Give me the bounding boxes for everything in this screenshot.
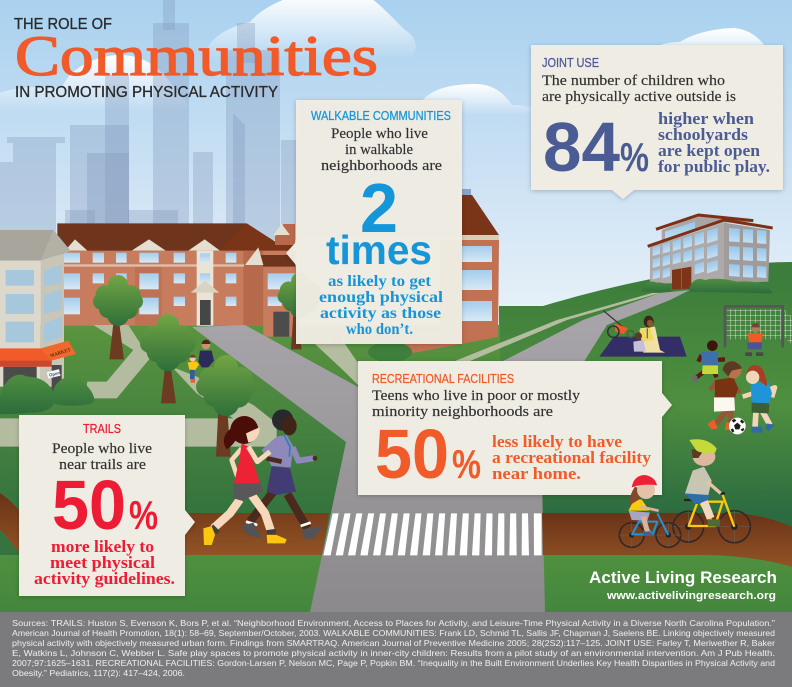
sources footer (0, 612, 792, 687)
sources footer: American Journal of Health Promotion, 18(1): 58–69, September/October, 2003. WALKABLE COMMUNITIES: Frank LD, Schmid TL, Sallis JF, Chapman J, Saelens BE. Linking objectively measured (12, 628, 775, 638)
number: 50 percent: 50 (52, 466, 126, 544)
adult and child walking on the path (188, 340, 214, 383)
left market building (0, 230, 76, 392)
light footpaths (0, 325, 277, 447)
sources footer: physical activity with objectively measured urban form. Findings from SMARTRAQ. American Journal of Preventive Medicine 2005; 28(2S2):117–125. JOINT USE: Farley T, Meriwether R, Baker (12, 638, 775, 648)
body text: near trails are (59, 457, 146, 473)
open sign: Open (49, 370, 61, 378)
panel: walkable communities (286, 100, 462, 344)
statistic text: near home. (492, 464, 581, 483)
right building wing behind card (403, 189, 499, 353)
heading: joint use: JOINT USE (542, 56, 599, 70)
title block (14, 16, 378, 101)
roads (192, 290, 690, 612)
statistic text (492, 432, 652, 483)
dirt trail (0, 493, 792, 567)
family on a blanket with stroller (599, 311, 687, 357)
body text: in walkable (345, 142, 413, 158)
crosswalk (323, 513, 542, 555)
number: 50 percent: % (129, 492, 158, 538)
number: 50 percent: 50 (375, 415, 449, 493)
trees and bushes (0, 272, 343, 457)
body text: People who live (331, 126, 428, 142)
brick campus building (57, 223, 297, 337)
number: 50 percent: % (452, 441, 481, 487)
statistic text: higher when (658, 109, 754, 128)
statistic text: who don’t. (346, 321, 413, 338)
body text (542, 73, 736, 105)
panel: recreational facilities (358, 361, 672, 495)
two people walking on the trail (203, 409, 323, 545)
statistic text: a recreational facility (492, 448, 652, 467)
small tree behind recreation card (368, 342, 412, 364)
statistic text: enough physical (319, 289, 444, 306)
sky (0, 0, 792, 330)
woman walking (203, 416, 287, 545)
statistic text: for public play. (658, 157, 770, 176)
number: 84 percent: 84 (543, 108, 620, 186)
soccer ball (729, 418, 746, 434)
body text: minority neighborhoods are (372, 404, 553, 420)
statistic text: activity guidelines. (34, 569, 175, 588)
sources footer: E, Watkins L, Johnson C, Webber L. Safe play spaces to promote physical activity in inner-city children: Results from a pilot study of an environmental intervention. Am J Pub Health. (12, 648, 775, 658)
statistic text: activity as those (320, 305, 441, 322)
panel: joint use (531, 45, 783, 199)
heading: trails: TRAILS (83, 422, 121, 436)
panel: trails (19, 415, 195, 596)
body text: The number of children who (542, 73, 725, 89)
body text: are physically active outside is (542, 89, 736, 105)
school on the hill (642, 215, 773, 293)
green hill and lawn (0, 262, 792, 612)
main title: Communities (15, 25, 378, 88)
sources footer: Obesity.” Pediatrics, 117(2): 417–424, 2006. (12, 668, 185, 678)
heading: walkable communities: WALKABLE COMMUNITIES (311, 109, 451, 123)
statistic text (34, 537, 175, 588)
older child on yellow bike (673, 439, 750, 543)
statistic text (658, 109, 770, 176)
open sign (47, 369, 61, 379)
sources footer: Sources: TRAILS: Huston S, Evenson K, Bors P, et al. “Neighborhood Environment, Access to Places for Activity, and Leisure-Time Physical Activity in a Diverse North Carolina Population.” (12, 618, 775, 628)
children playing soccer (692, 340, 775, 434)
city skyline (0, 0, 301, 240)
soccer goal and goalie (725, 306, 792, 356)
title line 3: IN PROMOTING PHYSICAL ACTIVITY (15, 84, 278, 101)
statistic text: meet physical (50, 553, 155, 572)
body text: Teens who live in poor or mostly (372, 388, 581, 404)
sources footer: 2007;97:1625–1631. RECREATIONAL FACILITIES: Gordon-Larsen P, Nelson MC, Page P, Popkin BM. “Inequality in the Built Environment Underlies Key Health Disparities in Physical Activity and (12, 658, 775, 668)
number: 2 times: 2 (360, 169, 398, 247)
cyclists (619, 439, 750, 547)
body text (372, 388, 581, 420)
title line 1: THE ROLE OF (14, 16, 112, 33)
younger child on blue bike (619, 475, 681, 547)
number: 2 times: times (326, 227, 432, 273)
statistic text: schoolyards (658, 125, 749, 144)
statistic text: as likely to get (328, 273, 432, 290)
number: 84 percent: % (620, 134, 649, 180)
logo: Active Living Research: Active Living Research (589, 569, 777, 587)
body text (52, 441, 152, 473)
body text (321, 126, 442, 174)
clouds (0, 0, 770, 115)
man walking (241, 409, 323, 539)
heading: recreational facilities: RECREATIONAL FACILITIES (372, 372, 514, 386)
statistic text (319, 273, 444, 338)
statistic text: more likely to (51, 537, 154, 556)
body text: People who live (52, 441, 152, 457)
logo: Active Living Research (589, 569, 777, 602)
statistic text: are kept open (658, 141, 760, 160)
number: 2 times (326, 169, 432, 273)
statistic text: less likely to have (492, 432, 622, 451)
body text: neighborhoods are (321, 158, 442, 174)
logo: Active Living Research: www.activelivingresearch.org (606, 590, 776, 602)
market sign: MARKET (50, 348, 72, 359)
